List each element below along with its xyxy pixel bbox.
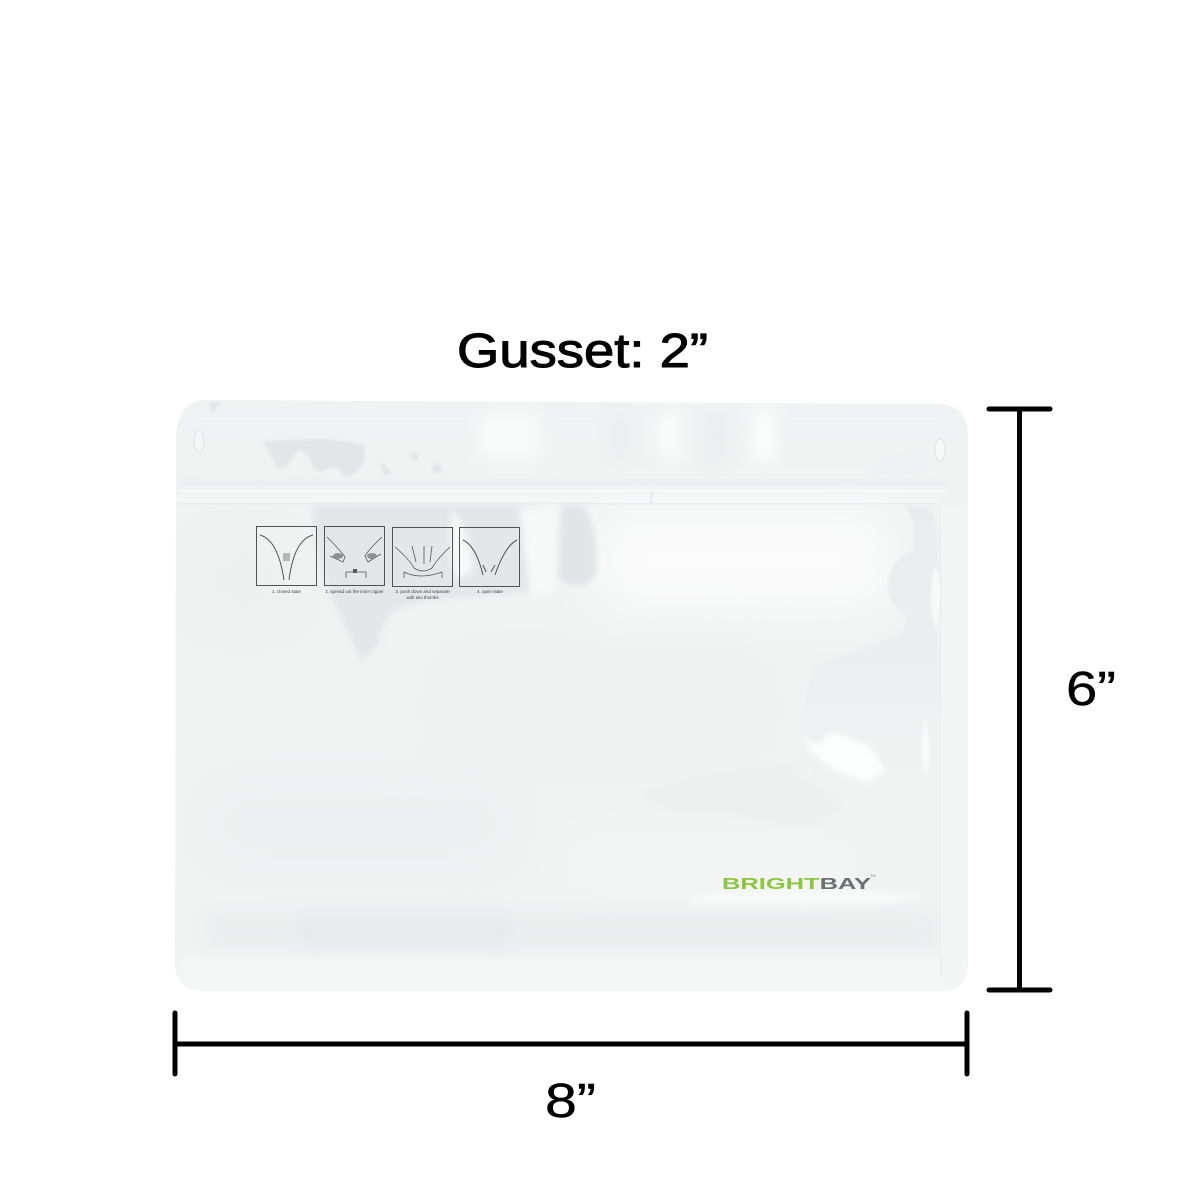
width label: 8” [545,1075,596,1128]
brand logo: BRIGHT BAY [722,876,872,893]
step 2: spread out the inner zipper [324,526,384,594]
hang holes [194,430,204,452]
heading: gusset: Gusset: 2” [457,325,708,378]
reflection under zipper [312,506,597,662]
step 2: spread out the inner zipper: 2. spread out the inner zipper [325,589,384,594]
height label: 6” [1066,663,1116,716]
step 1: closed state: 1. closed state [272,589,301,594]
top seal wrinkles [496,418,770,454]
width dimension bracket [175,1013,967,1074]
step 4: open state [460,528,520,594]
step 3: push down and separate with two thumbs: 3. push down and separate [395,589,450,594]
dark reflections along top [210,402,442,476]
zipper band [192,490,942,504]
white glare blob [809,734,882,780]
opening instructions icons [256,526,520,600]
soft body shading [624,531,866,590]
brand logo: TM [870,873,876,878]
pouch bag [175,400,968,992]
reflection on right side [889,508,936,610]
bottom fold bands [302,918,508,944]
faint crease outline [644,768,840,825]
height dimension bracket [989,409,1050,990]
step 4: open state: 4. open state [477,589,504,594]
step 3: push down and separate with two thumbs: with two thumbs [406,595,439,600]
right gusset seal edge [941,505,967,985]
step 3: push down and separate with two thumbs [392,528,452,600]
step 1: closed state [256,526,316,594]
